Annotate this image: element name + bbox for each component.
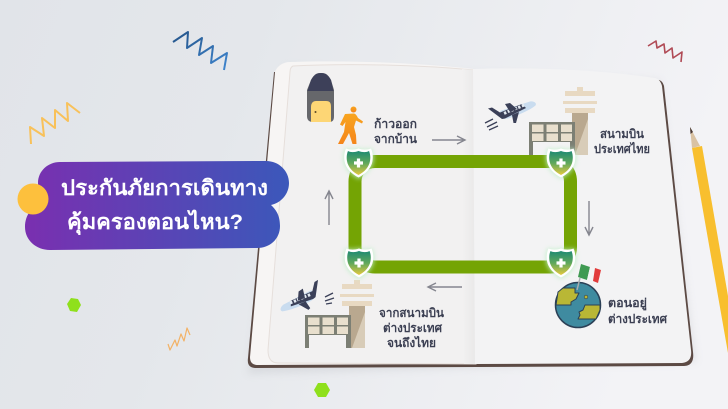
notebook cover (248, 72, 693, 368)
icon: italian flag (577, 264, 601, 290)
plane speed lines return (325, 293, 334, 304)
arrow: right (432, 136, 465, 144)
label: overseas: ต่างประเทศ (608, 312, 667, 326)
label: thai airport: ประเทศไทย (594, 141, 650, 156)
banner shape (25, 161, 289, 250)
right page (473, 68, 691, 364)
arrow: left (428, 283, 462, 291)
notebook (248, 61, 696, 374)
label: from foreign airport: จากสนามบิน (379, 306, 445, 320)
shield: top right (546, 148, 576, 179)
title line 1: ประกันภัยการเดินทาง (61, 177, 268, 200)
notebook shadow (248, 66, 696, 374)
gem: top green (67, 298, 81, 312)
left page outer leaves (250, 61, 476, 365)
label: from foreign airport: ต่างประเทศ (383, 321, 442, 335)
zigzag: blue (173, 32, 227, 70)
icon: walking person (338, 106, 363, 144)
arrow: down (585, 201, 593, 235)
icon: globe (556, 282, 600, 328)
title line 2: คุ้มครองตอนไหน? (67, 209, 243, 236)
label: thai airport (594, 127, 650, 156)
label: leaving home (374, 117, 418, 146)
icon: airport tower abroad (340, 280, 374, 348)
icon: house (307, 73, 334, 122)
pencil body (692, 146, 728, 353)
icon: airport terminal thai (529, 122, 575, 155)
label: from foreign airport: จนถึงไทย (387, 335, 436, 350)
pencil wood (690, 127, 700, 148)
pencil tip (690, 127, 693, 134)
left page (268, 65, 476, 364)
icon: airport terminal abroad (305, 315, 351, 348)
zigzag: yellow (30, 103, 80, 144)
icon: plane departing (488, 101, 536, 123)
shield: bottom right (546, 248, 576, 279)
icon: plane returning (279, 275, 328, 324)
zigzag: red (648, 41, 682, 62)
label: leaving home: ก้าวออก (374, 117, 417, 131)
arrow: up (325, 191, 333, 225)
label: thai airport: สนามบิน (600, 127, 645, 141)
label: from foreign airport (379, 306, 445, 350)
gem: bottom green (314, 383, 330, 397)
label: overseas (608, 296, 667, 326)
icon: airport tower thai (563, 87, 597, 155)
zigzag: small orange (168, 328, 190, 350)
title banner (18, 161, 289, 250)
label: overseas: ตอนอยู่ (608, 296, 647, 311)
banner dot (18, 184, 48, 214)
pencil (690, 127, 728, 353)
plane speed lines (485, 119, 498, 130)
shield: top left (343, 148, 374, 179)
route track (355, 162, 570, 267)
spine shading (462, 69, 476, 364)
label: leaving home: จากบ้าน (374, 132, 418, 146)
shield: bottom left (344, 248, 374, 279)
